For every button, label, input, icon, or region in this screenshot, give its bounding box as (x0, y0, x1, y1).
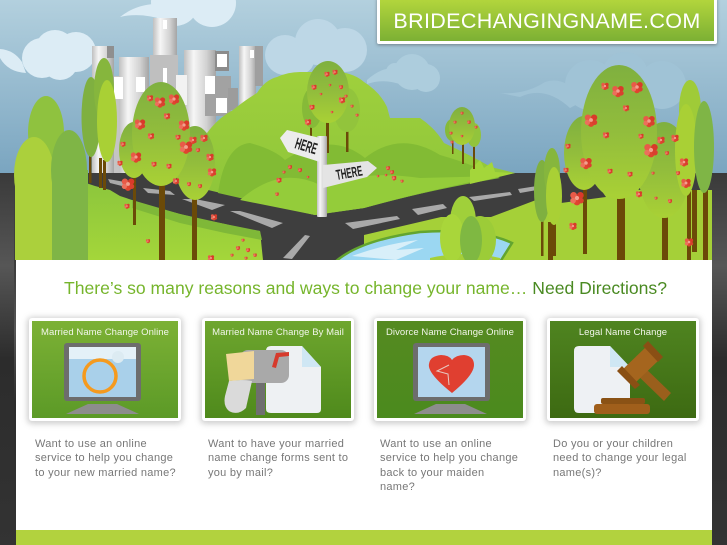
site title badge (377, 0, 717, 44)
description: legal (553, 438, 687, 478)
small trees on the hill (302, 61, 481, 169)
hills with sign backdrop (207, 72, 515, 215)
main white panel (16, 260, 712, 530)
buildings (92, 18, 263, 176)
icon: monitor with broken heart (413, 343, 490, 414)
signpost (280, 130, 377, 217)
headline: There’s so many reasons and ways to change your name… Need Directions? (64, 278, 667, 298)
site title badge: BRIDECHANGINGNAME.COM (393, 9, 701, 33)
description: married online: service to help you change (35, 452, 173, 464)
signpost: THERE (335, 163, 364, 184)
pond bushes (440, 196, 496, 264)
blossoms (117, 70, 693, 261)
description: legal: Do you or your children (553, 438, 673, 450)
description: married online: Want to use an online (35, 438, 147, 450)
description: divorce online: service to help you change (380, 452, 518, 464)
description: married by mail: Want to have your married (208, 438, 344, 450)
right grass field (364, 180, 712, 260)
description: married by mail: you by mail? (208, 466, 273, 478)
left grass field (83, 182, 263, 260)
right trees (534, 65, 714, 260)
icon: monitor with ring (64, 343, 141, 414)
panel: divorce name change online (374, 318, 526, 421)
pond (335, 231, 512, 262)
description: married by mail (208, 438, 348, 478)
side strips (0, 173, 727, 545)
description: divorce online: name? (380, 481, 415, 493)
panel: legal name change (547, 318, 699, 421)
left poplars (14, 58, 117, 260)
clouds (0, 0, 686, 110)
card title: Married Name Change Online (41, 327, 169, 338)
description: legal: need to change your legal (553, 452, 687, 464)
description: married online (35, 438, 176, 478)
description: married online: to your new married name? (35, 466, 176, 478)
panel: married name change online (29, 318, 181, 421)
description: divorce online: back to your maiden (380, 466, 484, 478)
description: married by mail: name change forms sent to (208, 452, 348, 464)
description: divorce online (380, 438, 518, 493)
icon: document and gavel (574, 341, 671, 414)
card title: Legal Name Change (579, 327, 667, 338)
field hedge (132, 200, 262, 240)
panel: married name change by mail (202, 318, 354, 421)
road markings (108, 179, 537, 259)
sky (0, 0, 727, 174)
card title: Married Name Change By Mail (212, 327, 344, 338)
footer green bar (16, 530, 712, 545)
card title: Divorce Name Change Online (386, 327, 514, 338)
left fruit tree group (119, 82, 215, 260)
description: divorce online: Want to use an online (380, 438, 492, 450)
icon: mailbox and document (224, 346, 321, 415)
road surface (0, 173, 727, 263)
description: legal: name(s)? (553, 466, 602, 478)
signpost: HERE (293, 135, 319, 158)
